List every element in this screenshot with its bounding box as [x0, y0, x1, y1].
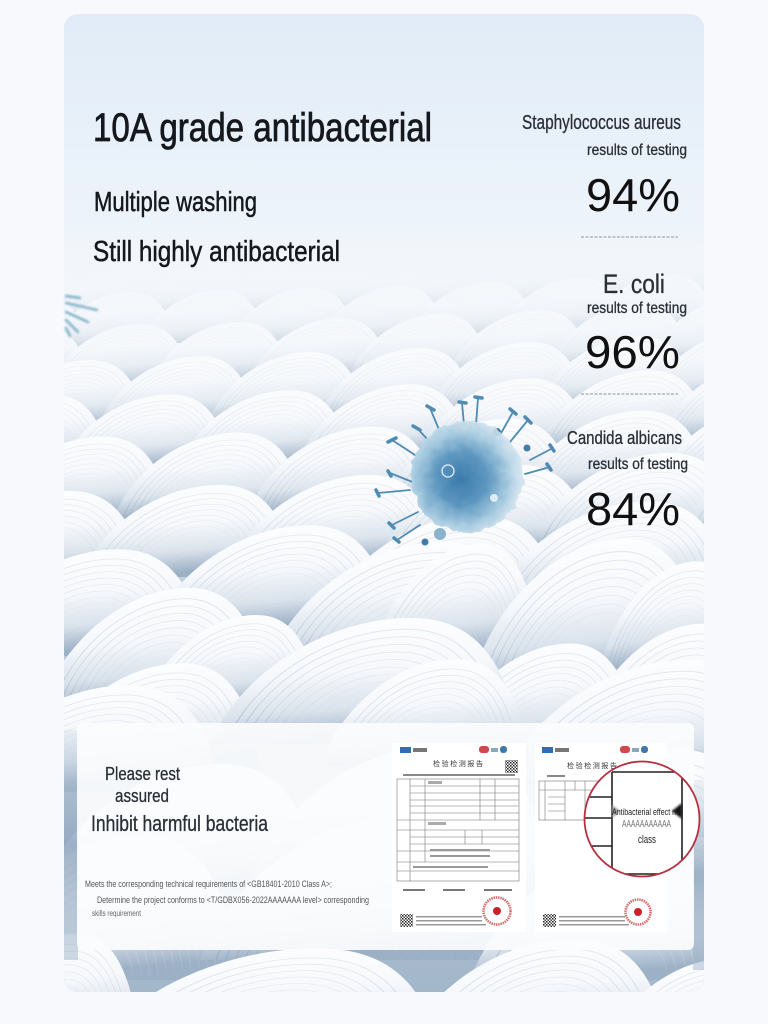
result: Candida albicans — [567, 428, 688, 535]
document: test report page 2 — [535, 743, 667, 932]
text: standards note: skills requirement — [92, 909, 142, 918]
text: please rest assured — [105, 764, 180, 806]
panel: certification — [77, 723, 700, 950]
callout: magnifier on grade: class — [638, 834, 656, 846]
text: please rest assured: Please rest — [105, 764, 180, 784]
document: test report page 2: 检验检测报告 — [567, 761, 617, 770]
document: test report page 1 — [392, 743, 526, 932]
callout: magnifier on grade: Antibacterial effect me — [612, 807, 682, 817]
text: inhibit harmful bacteria: Inhibit harmful bacteria — [91, 811, 269, 836]
result: E. coli: 96% — [585, 326, 680, 378]
title: 10A grade antibacterial — [93, 106, 432, 150]
text: standards note: Meets the corresponding technical requirements of <GB18401-2010 Class A>; — [85, 879, 332, 890]
callout: magnifier on grade — [584, 762, 700, 876]
result: Staphylococcus aureus — [522, 112, 687, 237]
result: E. coli: E. coli — [603, 269, 665, 299]
result: Candida albicans: results of testing — [588, 456, 688, 473]
result: E. coli — [581, 269, 687, 394]
result: Candida albicans: 84% — [586, 483, 680, 535]
result: Candida albicans: Candida albicans — [567, 428, 682, 448]
panel: woven fibre background — [64, 14, 704, 992]
icon: partial virus at left edge — [66, 296, 97, 336]
icon: virus — [376, 397, 554, 546]
callout: magnifier on grade: AAAAAAAAAAA — [622, 819, 671, 830]
heading: multiple washing: Multiple washing — [94, 186, 257, 217]
text: please rest assured: assured — [115, 786, 169, 806]
result: Staphylococcus aureus: results of testing — [587, 142, 687, 159]
result: Staphylococcus aureus: 94% — [586, 169, 680, 221]
result: E. coli: results of testing — [587, 300, 687, 317]
text: standards note — [85, 879, 369, 918]
heading: still highly antibacterial: Still highly antibacterial — [93, 236, 340, 268]
result: Staphylococcus aureus: Staphylococcus aureus — [522, 112, 681, 134]
document: test report page 1: 检验检测报告 — [433, 759, 483, 768]
text: standards note: Determine the project conforms to <T/GDBX056-2022AAAAAAA level> corresponding — [97, 895, 369, 906]
